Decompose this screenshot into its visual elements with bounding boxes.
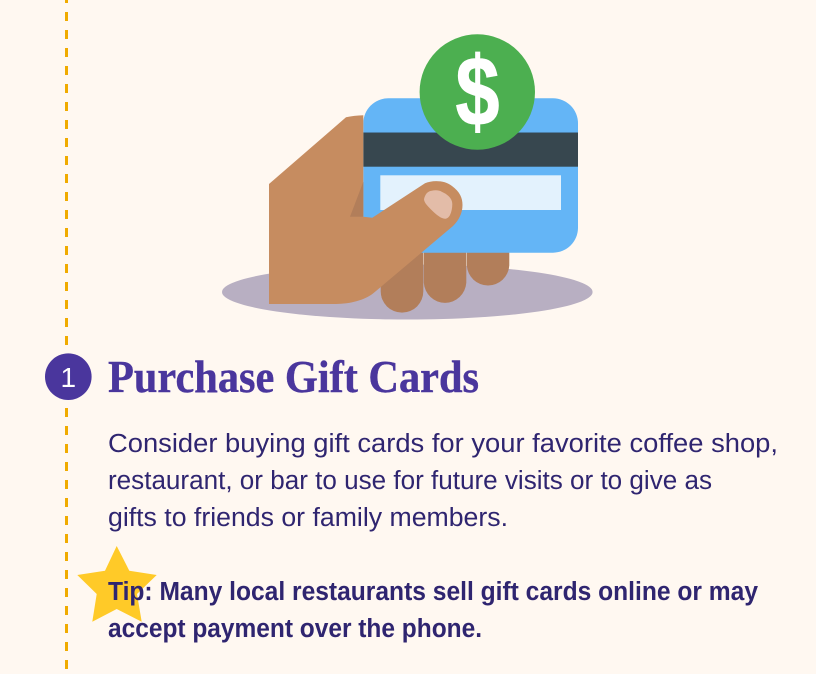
step number badge: 1: [61, 362, 76, 393]
body paragraph: restaurant, or bar to use for future visits or to give as: [108, 467, 712, 495]
tip text: Tip: Many local restaurants sell gift cards online or may: [108, 578, 759, 606]
icon: hand and thumb: [269, 115, 462, 304]
step number badge: [45, 353, 92, 400]
icon: credit card: [363, 98, 578, 253]
body paragraph: Consider buying gift cards for your favorite coffee shop,: [108, 430, 778, 458]
icon: star: [77, 546, 157, 622]
icon: dollar coin: $: [456, 36, 500, 146]
tip text: accept payment over the phone.: [108, 615, 482, 643]
body paragraph: [108, 430, 778, 532]
body paragraph: gifts to friends or family members.: [108, 504, 508, 532]
illustration: hand holding credit card: [222, 34, 593, 320]
tip text: [108, 578, 759, 643]
icon: fingers behind card: [381, 250, 509, 313]
shadow ellipse: [222, 264, 593, 320]
heading: Purchase Gift Cards: [108, 352, 479, 402]
icon: dollar coin: [420, 34, 535, 150]
